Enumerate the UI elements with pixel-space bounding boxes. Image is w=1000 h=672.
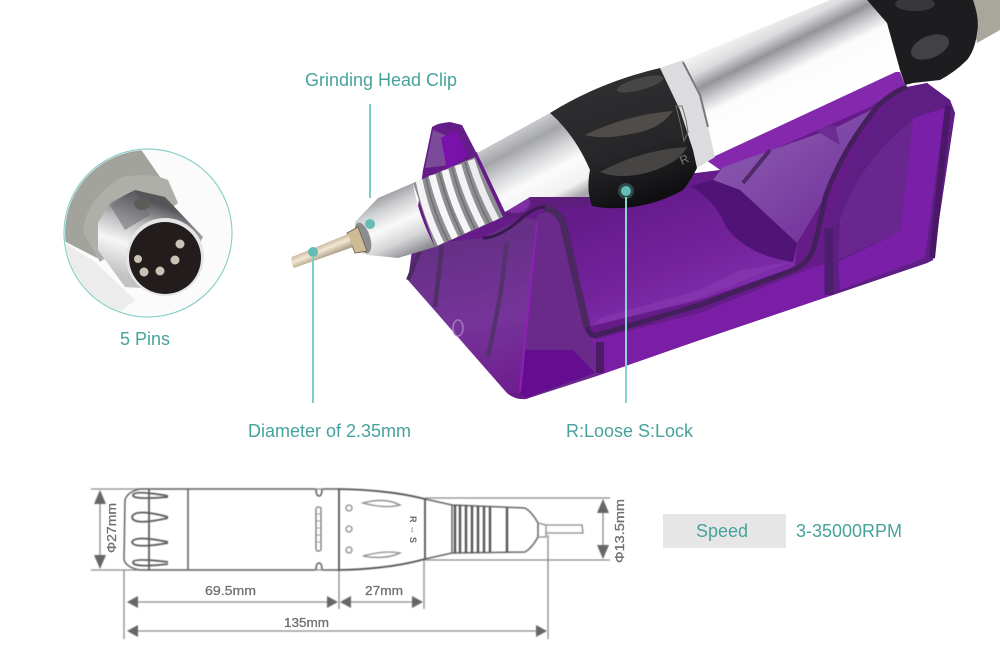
grip section [339, 489, 425, 570]
rear cap [124, 489, 189, 570]
dimension arrows [100, 491, 603, 631]
label: Diameter of 2.35mm [248, 421, 411, 441]
silver ring [660, 60, 715, 168]
grip recesses [585, 111, 673, 137]
nose tip [351, 221, 375, 255]
technical dimension drawing [91, 489, 610, 639]
five pins [134, 240, 184, 276]
silver tube [684, 0, 900, 157]
callout: diameter [248, 247, 411, 441]
handpiece pen: R [677, 151, 691, 168]
slot detail [316, 507, 321, 551]
left side face [408, 217, 537, 393]
top purple reflection [706, 72, 905, 172]
front lip and arch edge [587, 87, 907, 335]
extension lines [91, 489, 610, 639]
seat [567, 175, 797, 327]
panel: connector circle [63, 148, 233, 318]
front fin [520, 210, 597, 399]
speed value: 3-35000RPM [796, 521, 902, 541]
grip markings [676, 106, 688, 141]
rear silver end [968, 0, 1000, 43]
speed spec [663, 514, 902, 548]
black grip [550, 68, 697, 208]
callout: grinding head clip [305, 70, 457, 229]
dimension labels: R⇔S [408, 516, 418, 543]
dimension labels: 27mm [365, 583, 403, 598]
dimension labels: Φ13.5mm [612, 499, 627, 563]
rear wall [713, 107, 877, 243]
nose cone [355, 183, 435, 258]
stand silhouette [408, 83, 955, 399]
callout: lock [566, 183, 694, 441]
purple stand [408, 72, 955, 399]
collet [347, 227, 367, 253]
label: 5 Pins: 5 Pins [120, 329, 170, 349]
silver cone [477, 113, 590, 212]
connector photo [65, 150, 204, 312]
handpiece outline [188, 489, 339, 570]
grinding shaft pin [291, 234, 353, 268]
dimension labels: 69.5mm [205, 583, 256, 598]
label: R:Loose S:Lock [566, 421, 694, 441]
dimension labels [104, 499, 627, 630]
saddle edge [483, 207, 545, 238]
threaded ribs [413, 157, 503, 247]
speed spec: Speed [696, 521, 748, 541]
speed badge [663, 514, 786, 548]
heading: Grinding Head Clip [305, 70, 457, 90]
left fin highlight [425, 130, 468, 170]
nose section [425, 499, 538, 559]
circle outline [64, 149, 232, 317]
handpiece pen [291, 0, 1000, 268]
under-cone shadow [503, 195, 590, 218]
lower front strip [592, 262, 835, 376]
dimension labels: Φ27mm [104, 503, 119, 553]
dimension labels: 135mm [284, 615, 329, 630]
right arch face [827, 83, 955, 295]
rear black grip [867, 0, 978, 85]
